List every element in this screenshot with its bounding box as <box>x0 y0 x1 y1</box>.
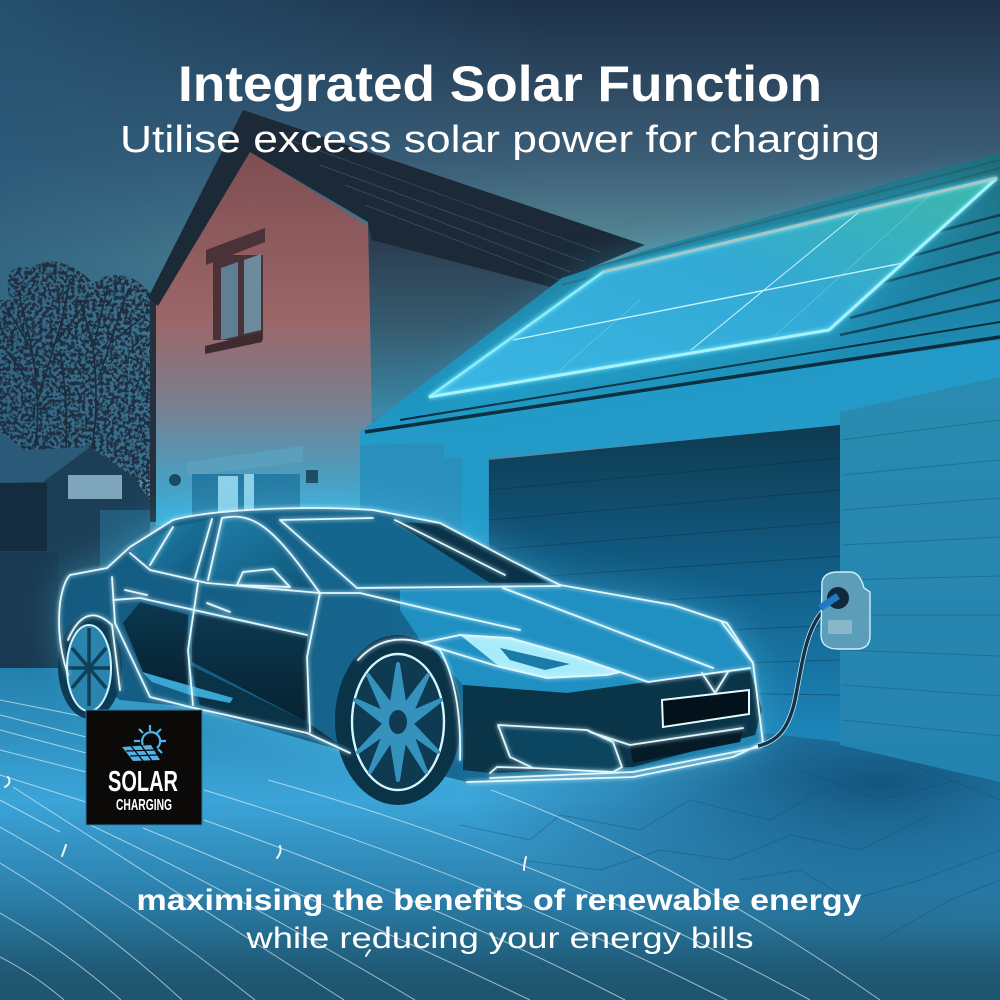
rear wheel <box>58 615 122 719</box>
front bumper <box>463 670 762 773</box>
solar panel <box>429 178 997 397</box>
upper window <box>205 228 265 354</box>
rear quarter window <box>130 527 173 563</box>
downpipe <box>150 300 156 522</box>
door lower panels <box>123 602 340 745</box>
ground leaf marks <box>5 777 526 956</box>
car body <box>60 508 763 782</box>
ground paving lines <box>460 760 1000 940</box>
background sky <box>0 0 1000 720</box>
bottom text line 1: maximising the benefits of renewable energy <box>136 884 862 917</box>
subtitle: Utilise excess solar power for charging <box>120 119 880 161</box>
car outline strokes <box>59 508 763 782</box>
ground floor door and lights <box>169 446 318 524</box>
title: Integrated Solar Function <box>178 56 822 112</box>
garage wall <box>840 377 1000 782</box>
fog light <box>498 725 622 772</box>
badge: solar charging <box>86 710 202 825</box>
windscreen dark wedge <box>395 522 548 583</box>
house roof <box>148 110 645 306</box>
distant house and fence <box>0 432 155 672</box>
wall charger and cable <box>758 572 870 746</box>
car glow <box>60 508 763 782</box>
bottom text line 2: while reducing your energy bills <box>245 922 754 955</box>
icon: sun over solar panel <box>122 725 166 761</box>
garage lintel <box>360 340 1000 542</box>
ground curved lines <box>0 700 880 1000</box>
badge: solar charging: CHARGING <box>116 797 172 814</box>
front side window <box>208 518 318 588</box>
car hood <box>400 587 753 693</box>
house gable wall <box>156 150 372 525</box>
windscreen <box>280 518 555 588</box>
headlight <box>460 635 620 678</box>
house side wall <box>368 222 565 420</box>
lower grille <box>630 730 743 763</box>
front wheel <box>335 635 461 805</box>
rear side window <box>150 519 212 578</box>
badge text: SOLAR <box>108 766 178 798</box>
bare trees <box>0 262 155 500</box>
car <box>58 508 763 805</box>
garage door <box>489 425 840 742</box>
ground <box>0 668 1000 1000</box>
number plate <box>662 690 749 727</box>
garage roof <box>360 153 1000 432</box>
brick wall under garage <box>360 436 490 600</box>
